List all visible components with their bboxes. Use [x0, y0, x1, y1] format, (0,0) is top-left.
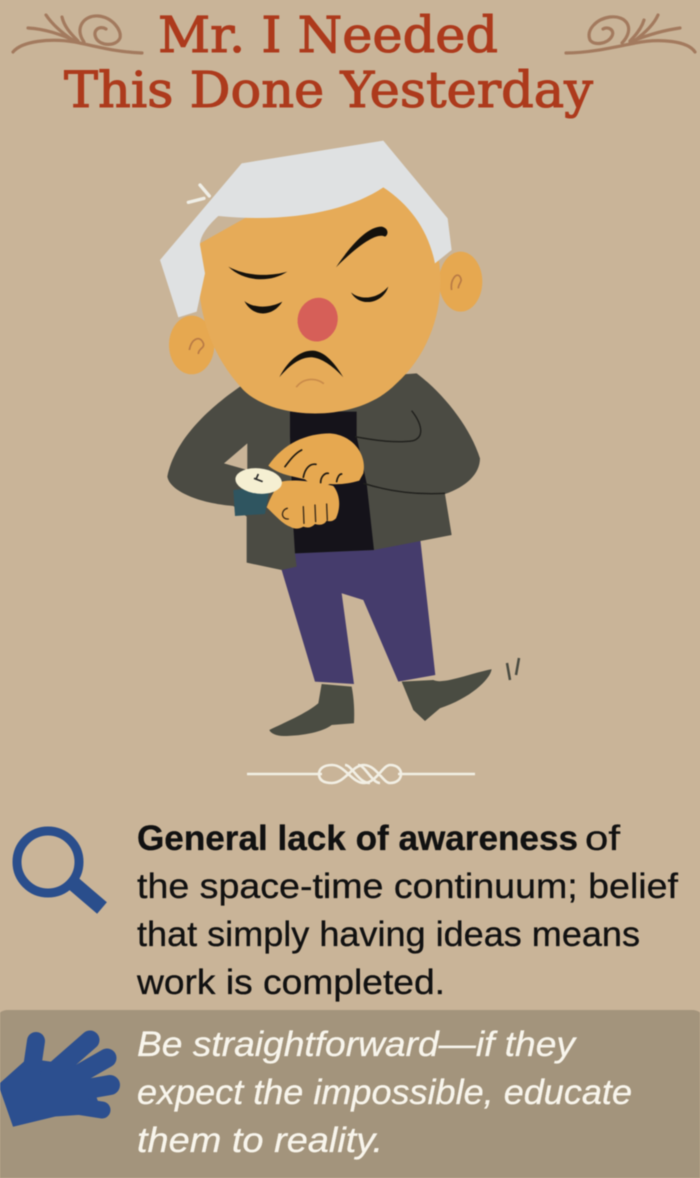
text block: description [136, 819, 678, 1002]
text block: description: that simply having ideas means [137, 915, 640, 954]
cuff [233, 487, 270, 516]
title [64, 6, 594, 119]
upper hand [268, 433, 364, 486]
eyebrows [228, 267, 287, 279]
watch [234, 466, 283, 496]
icon: right flourish [566, 15, 695, 53]
icon: magnifying glass [17, 831, 102, 908]
jacket [167, 373, 480, 570]
closed eyes [244, 301, 282, 313]
text block: description: of [585, 819, 620, 858]
title: This Done Yesterday [64, 61, 594, 119]
illustration: impatient man checking his watch [160, 141, 519, 736]
jacket fold [355, 411, 445, 494]
panel: advice [0, 1010, 700, 1178]
motion marks [507, 658, 519, 680]
trousers [280, 537, 435, 684]
icon: left flourish [13, 15, 142, 53]
nose [293, 293, 343, 346]
advice text: them to reality. [137, 1121, 383, 1160]
lower hand [267, 481, 339, 529]
text block: description: General lack of awareness [137, 819, 578, 858]
knot divider [247, 765, 475, 783]
figure body [167, 373, 492, 736]
ears [169, 316, 214, 374]
advice text: expect the impossible, educate [137, 1073, 632, 1112]
frown [279, 351, 343, 377]
hair [160, 141, 452, 317]
title: Mr. I Needed [158, 6, 498, 64]
advice text: Be straightforward—if they [137, 1025, 578, 1064]
text block: description: work is completed. [136, 963, 445, 1002]
gap between arm and body [224, 443, 247, 470]
text block: description: the space-time continuum; belief [137, 867, 678, 906]
advice text [137, 1025, 632, 1160]
left shoe [269, 684, 354, 736]
right shoe [402, 669, 492, 721]
shirt [290, 412, 374, 553]
face [198, 187, 440, 414]
head [160, 141, 482, 414]
icon: blue hand [0, 1040, 110, 1125]
